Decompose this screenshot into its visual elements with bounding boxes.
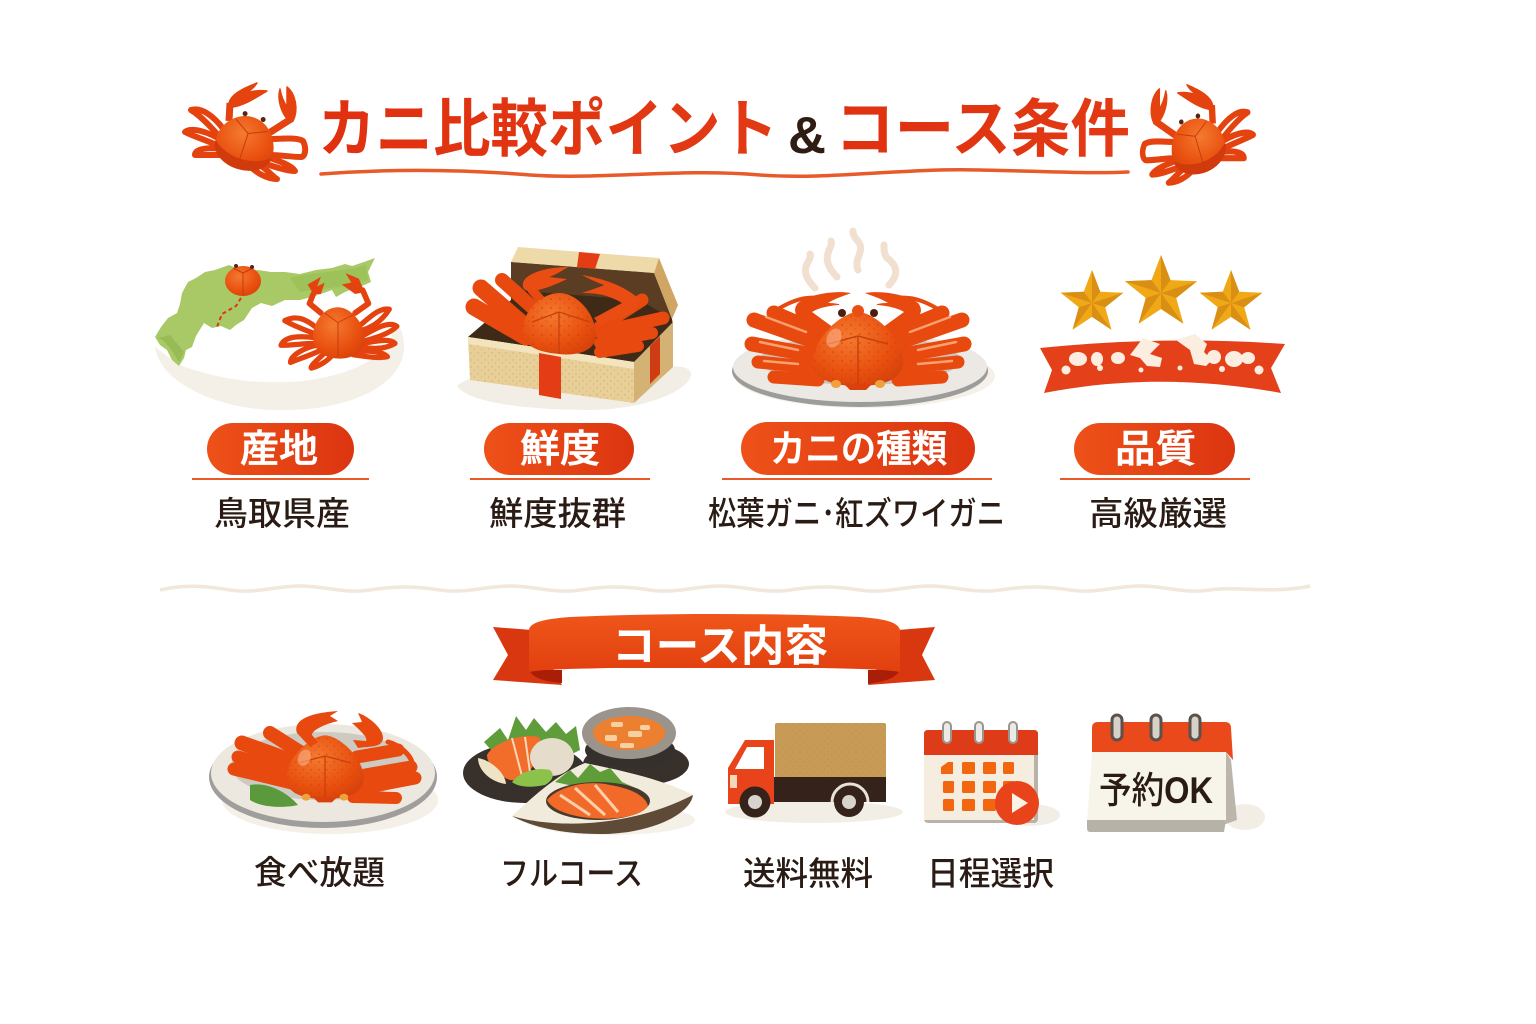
text: crab type value: 松葉ガニ･紅ズワイガニ <box>708 495 1005 532</box>
panel: full course <box>463 707 695 892</box>
title text: & <box>788 107 826 165</box>
heading: crab type pill: カニの種類 <box>770 429 947 471</box>
text: all you can eat: 食べ放題 <box>254 854 385 891</box>
panel: freshness <box>457 247 691 532</box>
panel: date selection <box>924 722 1060 892</box>
heading: freshness pill <box>484 423 634 475</box>
icon: steam <box>805 231 896 288</box>
icon: sashimi and soup <box>463 707 695 835</box>
text: origin value: 鳥取県産 <box>214 495 350 532</box>
panel: free shipping <box>725 723 903 892</box>
icon: ribbon <box>1040 334 1285 393</box>
icon: map with crabs <box>155 258 404 410</box>
text: full course: フルコース <box>500 855 643 892</box>
text: freshness value: 鮮度抜群 <box>489 495 626 532</box>
heading: quality pill <box>1074 423 1235 475</box>
icon: truck <box>725 723 903 823</box>
icon: left crab <box>185 83 305 179</box>
heading: origin pill: 産地 <box>240 429 318 471</box>
icon: calendar with play <box>924 722 1060 826</box>
icon: crab in box <box>457 247 691 410</box>
panel: quality <box>1040 255 1285 532</box>
heading: origin pill <box>207 423 354 475</box>
title underline <box>321 170 1128 176</box>
title text: コース条件 <box>835 95 1130 165</box>
icon: desk calendar <box>1087 715 1265 832</box>
panel: all you can eat <box>209 711 438 891</box>
icon: crab on plate <box>732 292 995 408</box>
icon: three stars <box>1061 255 1262 330</box>
icon: crab plate <box>209 711 438 834</box>
panel: origin <box>155 258 404 532</box>
title <box>185 83 1253 183</box>
banner: course contents <box>493 614 935 685</box>
heading: crab type pill <box>741 422 975 475</box>
heading: freshness pill: 鮮度 <box>520 429 600 471</box>
text: free shipping: 送料無料 <box>743 855 873 892</box>
title text: カニ比較ポイント <box>318 95 778 165</box>
panel: crab type <box>708 231 1005 532</box>
banner title: コース内容 <box>612 623 828 671</box>
icon: right crab <box>1143 85 1253 183</box>
panel: reservation ok <box>1087 715 1265 832</box>
heading: quality pill: 品質 <box>1115 429 1196 471</box>
calendar text: 予約OK <box>1099 770 1213 811</box>
text: quality value: 高級厳選 <box>1089 495 1227 532</box>
title text <box>318 95 1130 165</box>
text: date selection: 日程選択 <box>927 855 1054 892</box>
